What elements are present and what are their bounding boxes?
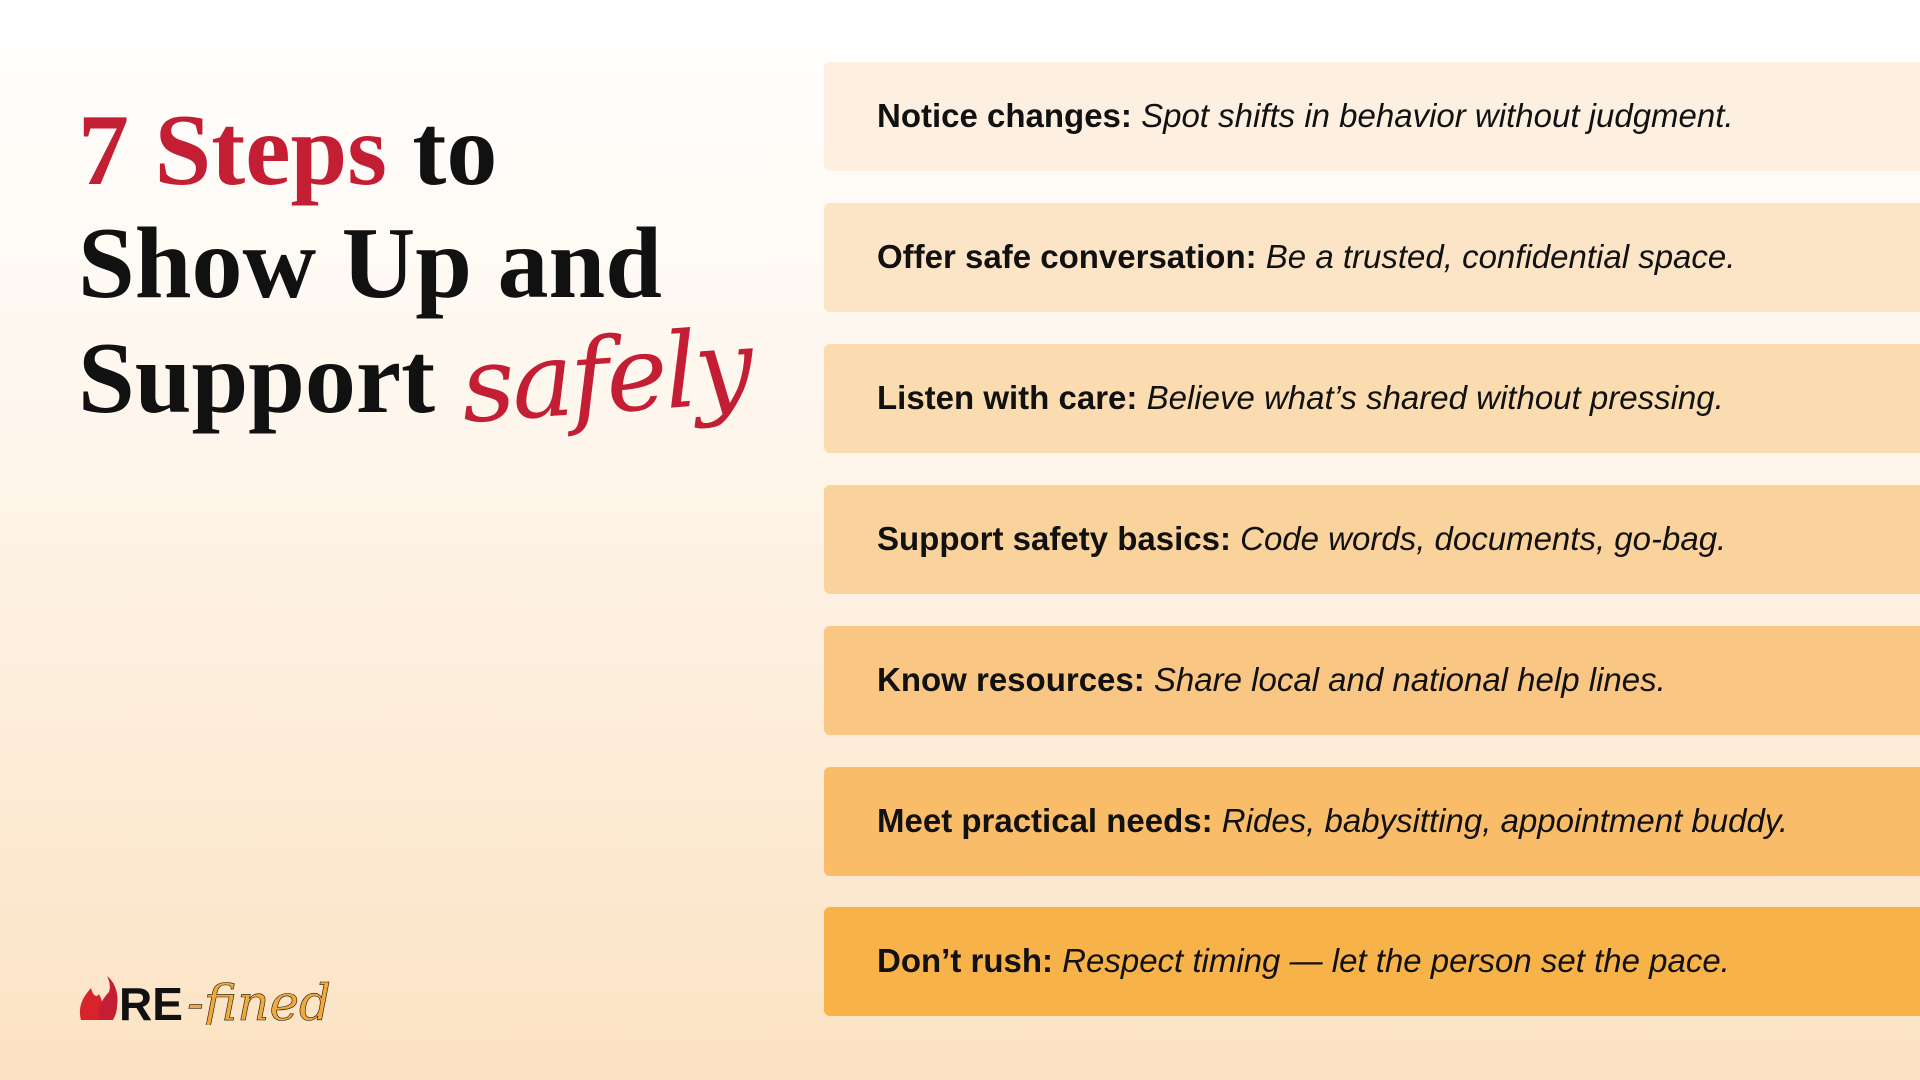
step 1 — [824, 62, 1920, 171]
step 4 — [824, 485, 1920, 594]
step 5 — [824, 626, 1920, 735]
title — [78, 94, 754, 447]
title: Support — [78, 322, 435, 435]
step 7: Don’t rush: Respect timing — let the person set the pace. — [877, 942, 1730, 979]
title: safely — [457, 305, 754, 447]
step 3: Listen with care: Believe what’s shared without pressing. — [877, 379, 1724, 416]
title: Show Up and — [78, 207, 662, 320]
step 3 — [824, 344, 1920, 453]
icon: flame hearts — [80, 976, 118, 1020]
step 4: Support safety basics: Code words, documents, go-bag. — [877, 520, 1726, 557]
step 5: Know resources: Share local and national help lines. — [877, 661, 1666, 698]
step 2 — [824, 203, 1920, 312]
title: 7 Steps to — [78, 94, 497, 207]
step 7 — [824, 907, 1920, 1016]
logo text — [119, 974, 331, 1032]
logo — [80, 974, 331, 1025]
step 1: Notice changes: Spot shifts in behavior without judgment. — [877, 97, 1734, 134]
step 6: Meet practical needs: Rides, babysitting, appointment buddy. — [877, 802, 1788, 839]
step 2: Offer safe conversation: Be a trusted, confidential space. — [877, 238, 1735, 275]
step 6 — [824, 767, 1920, 876]
